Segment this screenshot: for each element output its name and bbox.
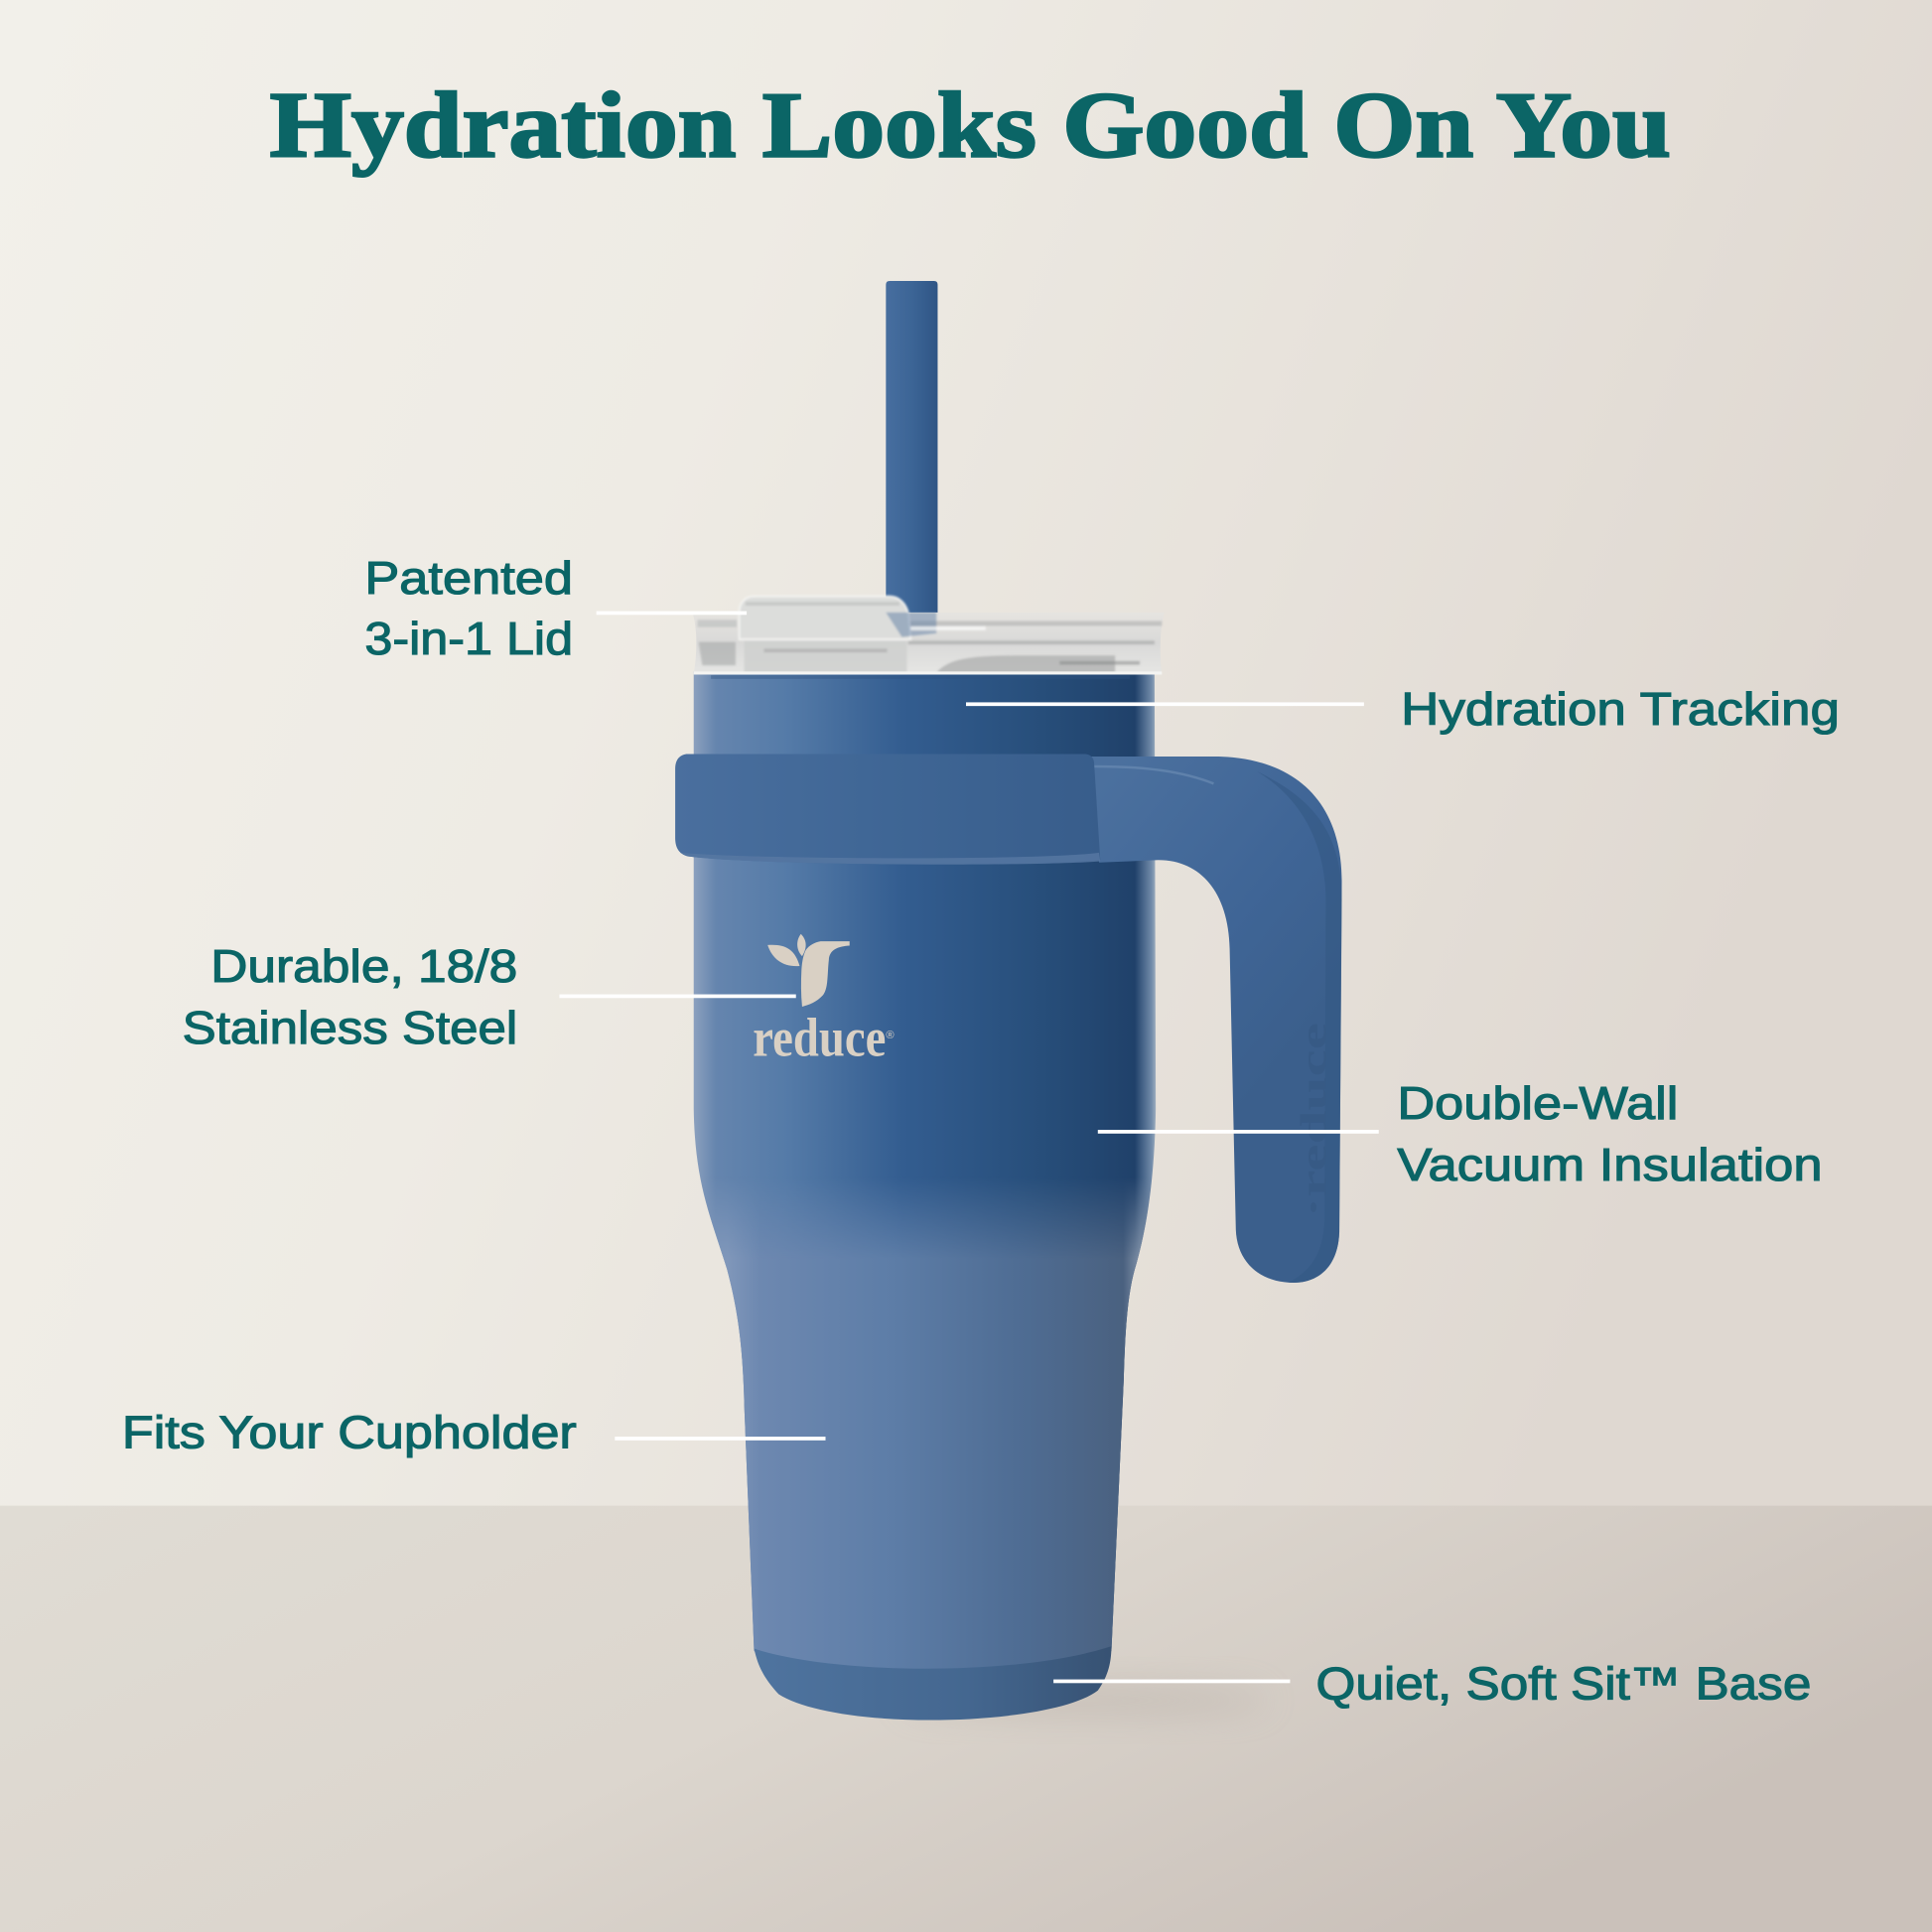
embossed handle logo: ·reduce [1294,1023,1334,1217]
straw [886,281,937,617]
callout: cupholder: Fits Your Cupholder [122,1406,577,1457]
callout: vacuum insulation: Double-Wall [1397,1077,1678,1129]
background floor [0,1506,1932,1932]
handle band [675,755,1100,865]
callout: hydration tracking [966,683,1840,735]
callout: patented lid: Patented [364,552,573,604]
floor shadow [899,1686,1269,1716]
callout: cupholder [122,1406,826,1457]
callout: hydration tracking: Hydration Tracking [1401,683,1840,735]
callout: vacuum insulation [1098,1077,1823,1190]
registered mark: ® [886,1030,895,1041]
callout: patented lid [364,552,747,664]
tumbler body [694,671,1156,1672]
callout: patented lid: 3-in-1 Lid [364,613,573,664]
background wall [0,0,1932,1507]
callout: soft sit base: Quiet, Soft Sit™ Base [1315,1657,1811,1709]
callout: vacuum insulation: Vacuum Insulation [1397,1139,1823,1190]
callout: soft sit base [1053,1657,1811,1709]
callout: stainless steel [183,940,796,1053]
silicone base [755,1646,1111,1721]
engraved reduce logo [753,934,895,1068]
logo mark [767,934,850,1007]
tumbler illustration [675,281,1342,1721]
handle [1089,757,1342,1283]
logo wordmark: reduce [753,1008,886,1068]
callout: stainless steel: Stainless Steel [183,1002,517,1053]
clear lid [692,597,1165,674]
title: Hydration Looks Good On You [270,74,1671,178]
callout: stainless steel: Durable, 18/8 [210,940,517,992]
